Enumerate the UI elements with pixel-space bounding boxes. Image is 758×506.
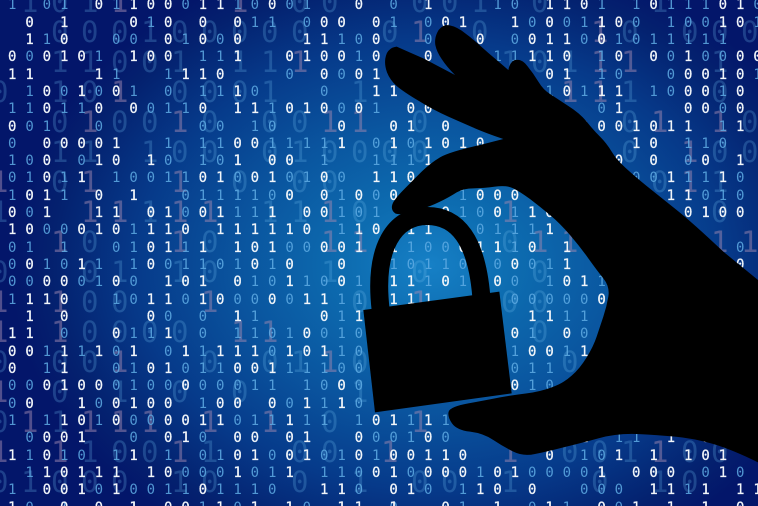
icon: hand silhouette — [385, 25, 758, 463]
icon: padlock body — [363, 292, 512, 412]
icon: padlock shackle — [379, 216, 481, 310]
